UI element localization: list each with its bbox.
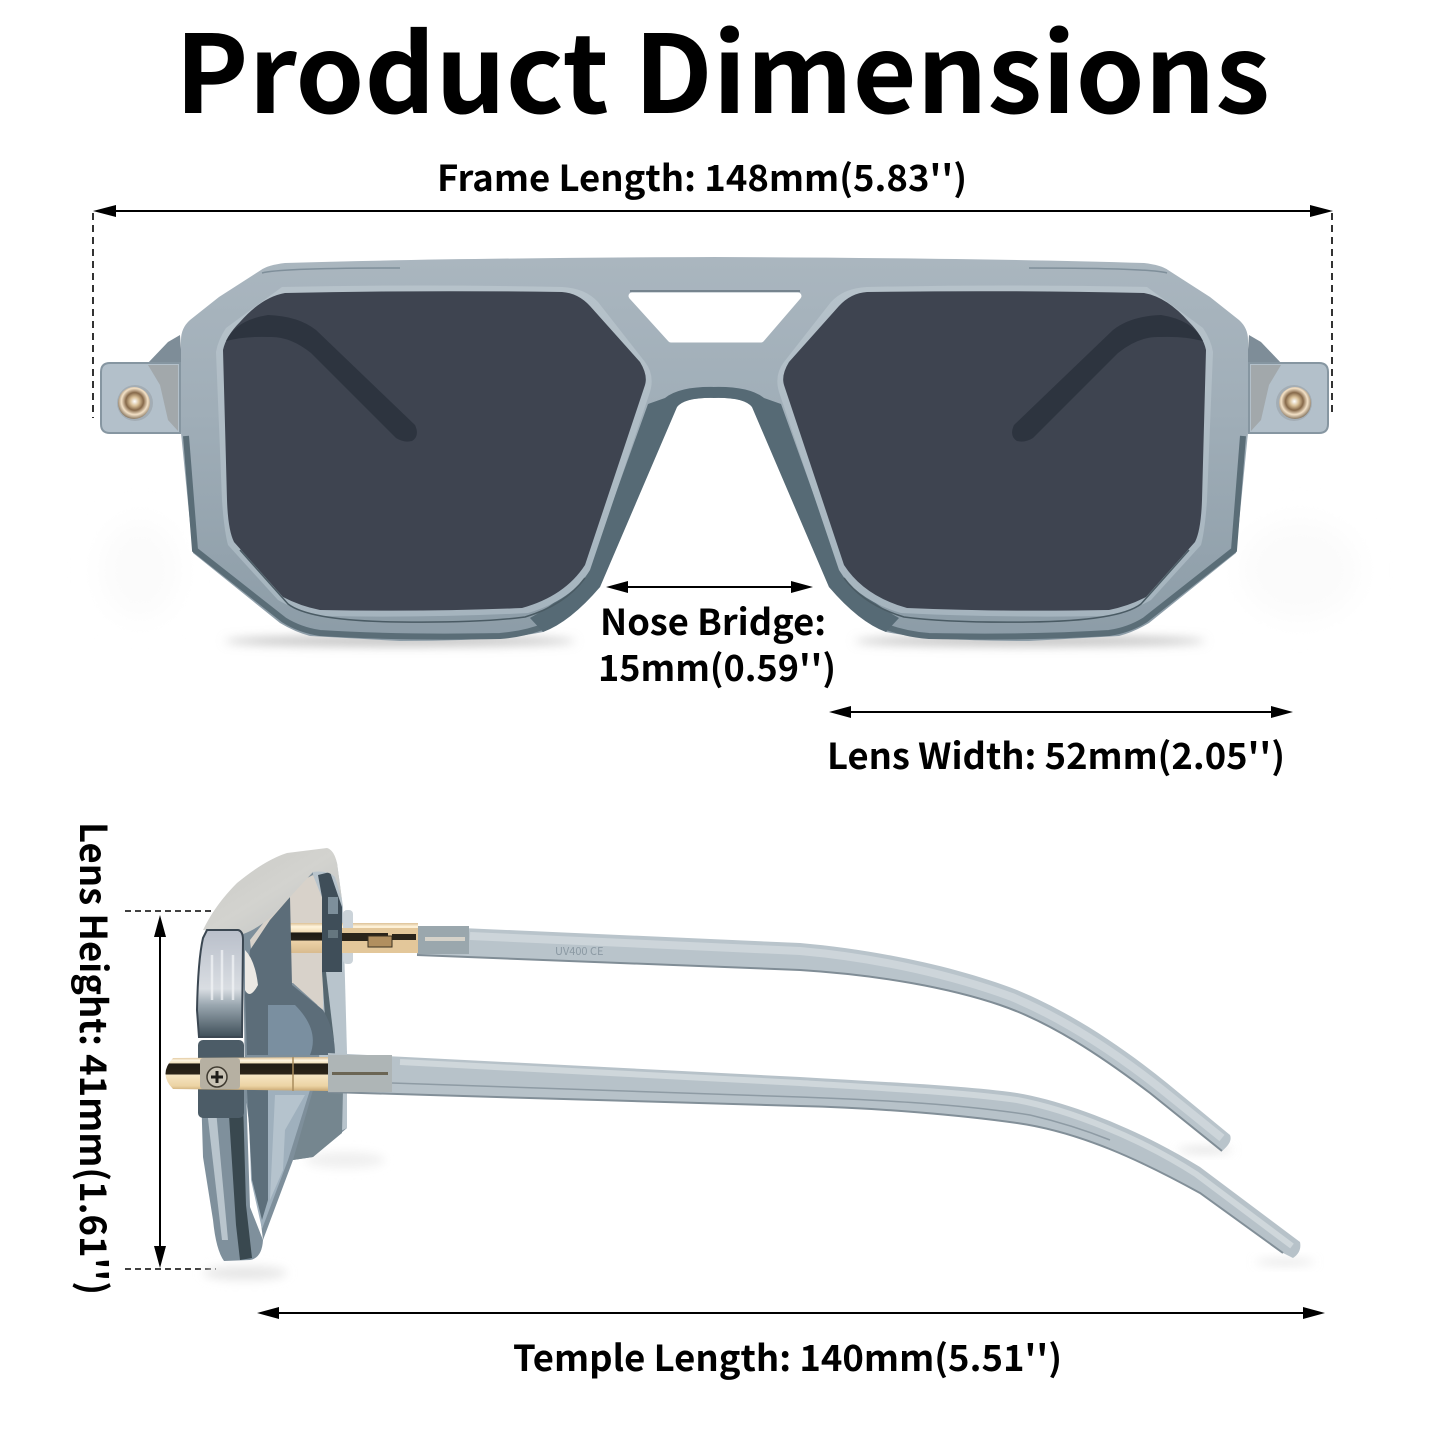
near hinge	[166, 1057, 328, 1091]
top face	[203, 848, 342, 934]
left temple stub	[147, 335, 182, 364]
lens blue panel	[268, 1005, 313, 1055]
left hinge nub	[101, 363, 180, 433]
left frame dark edge	[186, 436, 545, 637]
left rim line	[240, 550, 585, 622]
near temple	[328, 1053, 1300, 1258]
far temple	[417, 926, 1231, 1151]
arrow: lens width	[829, 706, 1293, 718]
arrow: temple length	[257, 1307, 1325, 1319]
left lens temple reflection	[226, 315, 417, 442]
left stud	[117, 385, 153, 421]
side window highlight	[245, 950, 258, 994]
hinge details	[342, 928, 418, 953]
screw	[207, 1067, 227, 1087]
arrow: nose bridge	[606, 581, 813, 593]
left lens	[223, 291, 646, 611]
left nose pad dark band	[530, 387, 716, 632]
left lens rim	[216, 286, 652, 617]
clip block	[198, 1040, 244, 1118]
bridge cutout	[630, 291, 800, 339]
label: nose bridge: 15mm(0.59'')	[598, 640, 836, 692]
upper hinge gold tube	[290, 923, 418, 953]
left half of frame	[101, 257, 716, 641]
label: frame length: Frame Length: 148mm(5.83'')	[437, 150, 967, 202]
rear frame strip	[313, 850, 347, 1140]
frame backing	[243, 872, 347, 1240]
label: lens width: Lens Width: 52mm(2.05'')	[827, 728, 1285, 780]
far temple: UV400 CE	[555, 943, 604, 959]
side view sunglasses	[166, 848, 1315, 1280]
front face upper	[197, 930, 243, 1037]
label: nose bridge	[598, 594, 836, 692]
arrow: lens height	[125, 911, 216, 1269]
top bevel line left	[262, 268, 400, 273]
far hinge pin	[343, 910, 353, 964]
label: temple length: Temple Length: 140mm(5.51'')	[513, 1330, 1062, 1382]
tube seam	[292, 1057, 294, 1091]
lower lens	[248, 1090, 310, 1229]
screw clip	[200, 1058, 240, 1089]
lower back panel	[293, 1090, 343, 1160]
label: nose bridge: Nose Bridge:	[600, 594, 826, 646]
lens dark inner panel	[245, 897, 335, 1055]
right half of frame	[713, 257, 1328, 641]
left frame body	[181, 257, 716, 641]
front view sunglasses	[100, 257, 1360, 646]
front face lower	[200, 1057, 263, 1261]
frame shadows	[100, 520, 1360, 646]
label: lens height: Lens Height: 41mm(1.61'')	[69, 822, 123, 1295]
front face upper highlights	[212, 950, 233, 1000]
arrow: frame length	[93, 205, 1333, 418]
inner lens tint	[250, 875, 323, 1010]
rear dark post	[318, 872, 342, 1040]
side shadow	[203, 1148, 1315, 1280]
